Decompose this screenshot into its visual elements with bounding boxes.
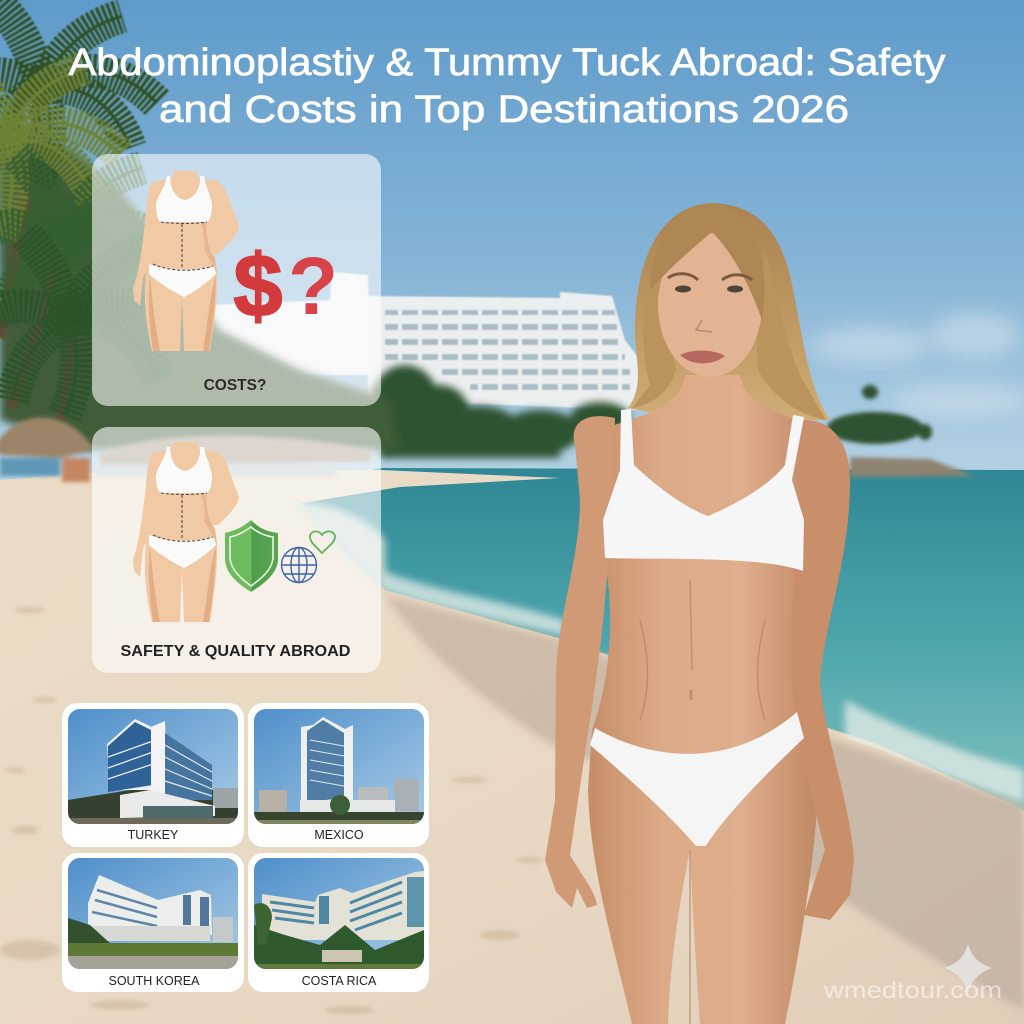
body shading — [640, 580, 765, 1024]
destination card: Costa Rica — [248, 853, 429, 992]
destination card: Mexico — [248, 703, 429, 847]
hospital photo: South Korea — [68, 858, 238, 969]
right arm — [792, 420, 854, 920]
left arm — [545, 416, 615, 908]
destination card: Turkey — [62, 703, 244, 847]
icon: sparkle — [944, 944, 992, 992]
white bikini bottom — [590, 712, 804, 846]
hair behind shoulders — [628, 203, 830, 420]
hospital photo: Mexico — [254, 709, 424, 824]
clouds — [810, 313, 1024, 415]
palm forest — [0, 3, 400, 450]
label: costs: COSTS? — [204, 377, 266, 394]
icon: question mark: ? — [288, 241, 338, 332]
title: and Costs in Top Destinations 2026 — [159, 89, 849, 131]
torso and legs — [588, 375, 825, 1024]
watermark text: wmedtour.com — [823, 977, 1002, 1003]
panel: costs — [92, 154, 381, 406]
beach huts and sunbeds — [0, 417, 370, 482]
body diagram with incision lines — [133, 442, 239, 622]
icon: heart outline — [310, 531, 335, 553]
title: Abdominoplastiy & Tummy Tuck Abroad: Safety — [68, 42, 946, 84]
sand — [0, 470, 1024, 1024]
label: South Korea: SOUTH KOREA — [108, 974, 200, 988]
facial features — [668, 274, 752, 363]
face — [658, 233, 762, 377]
panel: safety and quality — [92, 427, 381, 673]
label: Costa Rica: COSTA RICA — [302, 974, 377, 988]
distant island — [827, 385, 975, 477]
label: safety and quality abroad: SAFETY & QUALITY ABROAD — [120, 643, 350, 660]
title — [68, 42, 946, 131]
watermark: wmedtour.com — [823, 944, 1002, 1003]
sand texture — [0, 607, 544, 1014]
woman on the beach — [545, 203, 854, 1024]
wet sand — [385, 595, 1024, 1010]
destination card: South Korea — [62, 853, 244, 992]
tree line — [370, 365, 630, 458]
surf foam — [380, 570, 1024, 803]
sky — [0, 0, 1024, 480]
hair top — [650, 203, 764, 320]
icon: globe — [282, 548, 316, 582]
label: Turkey: TURKEY — [128, 828, 179, 842]
label: Mexico: MEXICO — [314, 828, 364, 842]
icon: green shield — [225, 520, 278, 592]
body diagram with incision lines — [133, 171, 239, 351]
icon: dollar sign: $ — [234, 236, 282, 335]
hotel tower — [210, 272, 640, 410]
sea — [290, 468, 1024, 810]
hospital photo: Turkey — [68, 709, 238, 824]
white bikini top — [603, 409, 804, 571]
hospital photo: Costa Rica — [254, 858, 424, 969]
shallow water haze — [290, 500, 385, 592]
hair over shoulders — [632, 250, 826, 420]
